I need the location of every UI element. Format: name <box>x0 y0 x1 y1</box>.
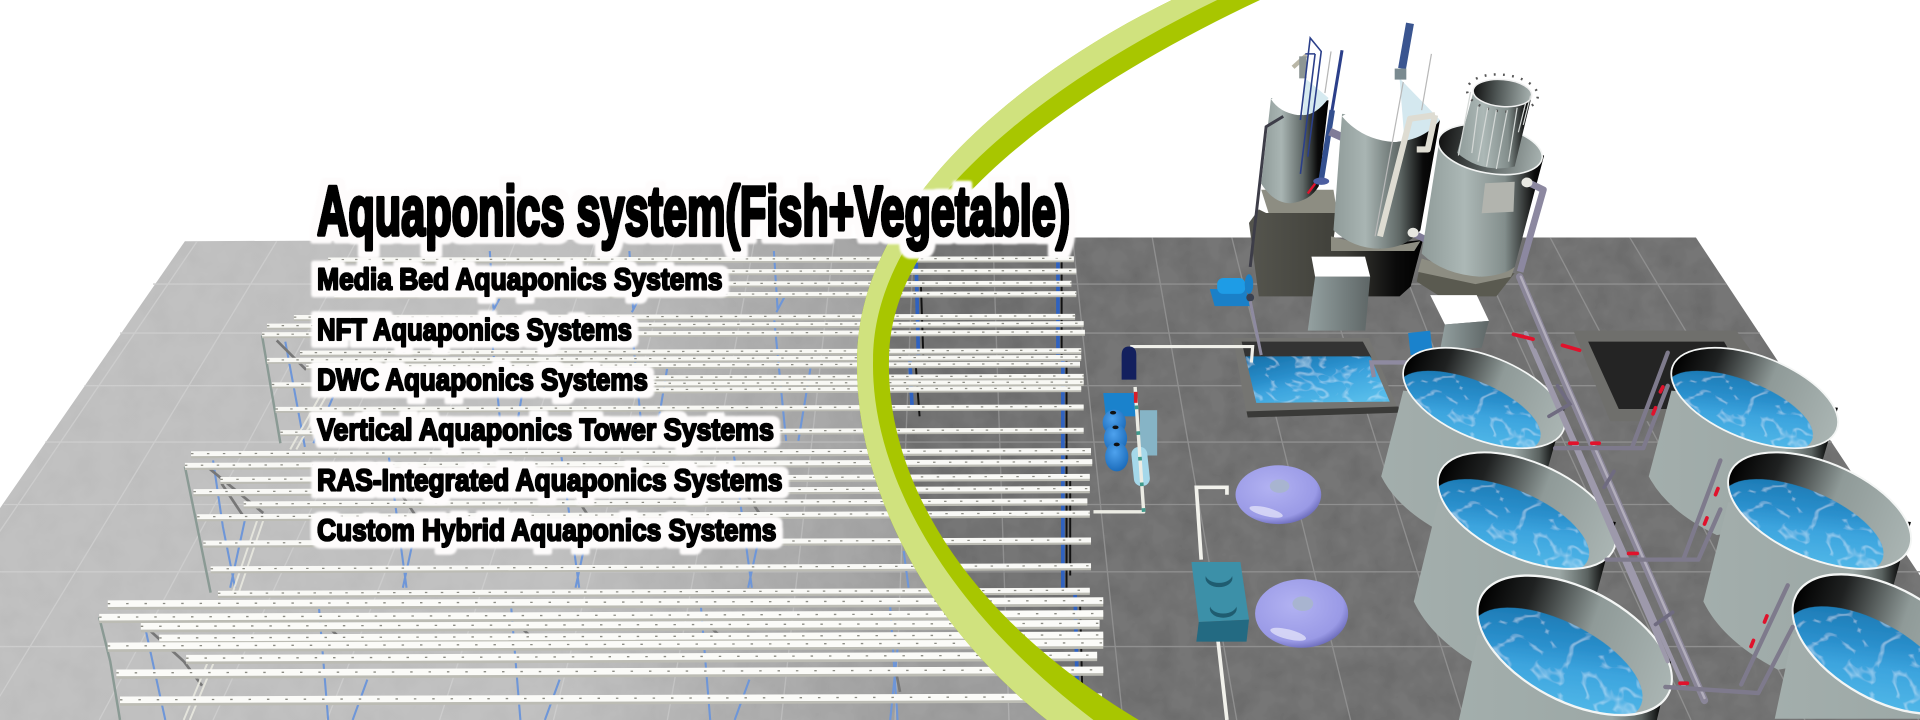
second cabinet <box>1430 295 1489 350</box>
item: NFT: NFT Aquaponics Systems <box>317 313 632 347</box>
teal blower box <box>1191 562 1249 642</box>
left filter tank <box>1250 38 1354 267</box>
item: DWC: DWC Aquaponics Systems <box>317 363 648 397</box>
item: RAS integrated: RAS-Integrated Aquaponics Systems <box>317 463 782 497</box>
white air pipes <box>1196 487 1227 720</box>
fish tank middle left <box>1414 429 1632 670</box>
white wash over left of curve <box>0 0 1172 720</box>
control cabinet <box>1308 257 1370 331</box>
rack block 3 <box>185 451 1092 595</box>
small water pool <box>1233 338 1400 418</box>
water manifold pipes <box>1513 277 1793 700</box>
rack block 1 <box>328 258 1076 297</box>
dark sump pool <box>1573 331 1763 421</box>
air disc one <box>1236 465 1321 524</box>
filter tank bases <box>1249 190 1515 296</box>
tiled floor <box>0 238 1920 720</box>
title: Aquaponics system(Fish+Vegetable) <box>317 172 1070 250</box>
right filter tank with screen drum <box>1422 71 1546 277</box>
fish tank middle right <box>1703 429 1920 670</box>
item: vertical tower: Vertical Aquaponics Tower Systems <box>317 413 774 447</box>
fish tank front right <box>1774 546 1920 720</box>
pressure tank and pump station <box>1093 347 1253 512</box>
blue circulation pump <box>1210 274 1261 355</box>
air disc two <box>1255 579 1348 648</box>
rack block 4 <box>99 601 1103 702</box>
middle filter tank <box>1333 23 1463 249</box>
small pump by second cabinet <box>1371 331 1445 377</box>
fish tank back left <box>1381 327 1579 535</box>
item: custom hybrid: Custom Hybrid Aquaponics Systems <box>317 514 776 548</box>
green curved band <box>857 0 1260 720</box>
item: media bed: Media Bed Aquaponics Systems <box>317 263 722 297</box>
rack block 2 <box>262 316 1085 434</box>
system type list <box>317 263 782 548</box>
hydroponic rack supports <box>99 251 1082 720</box>
fish tank back right <box>1649 327 1853 535</box>
fish tank front left <box>1458 547 1689 720</box>
